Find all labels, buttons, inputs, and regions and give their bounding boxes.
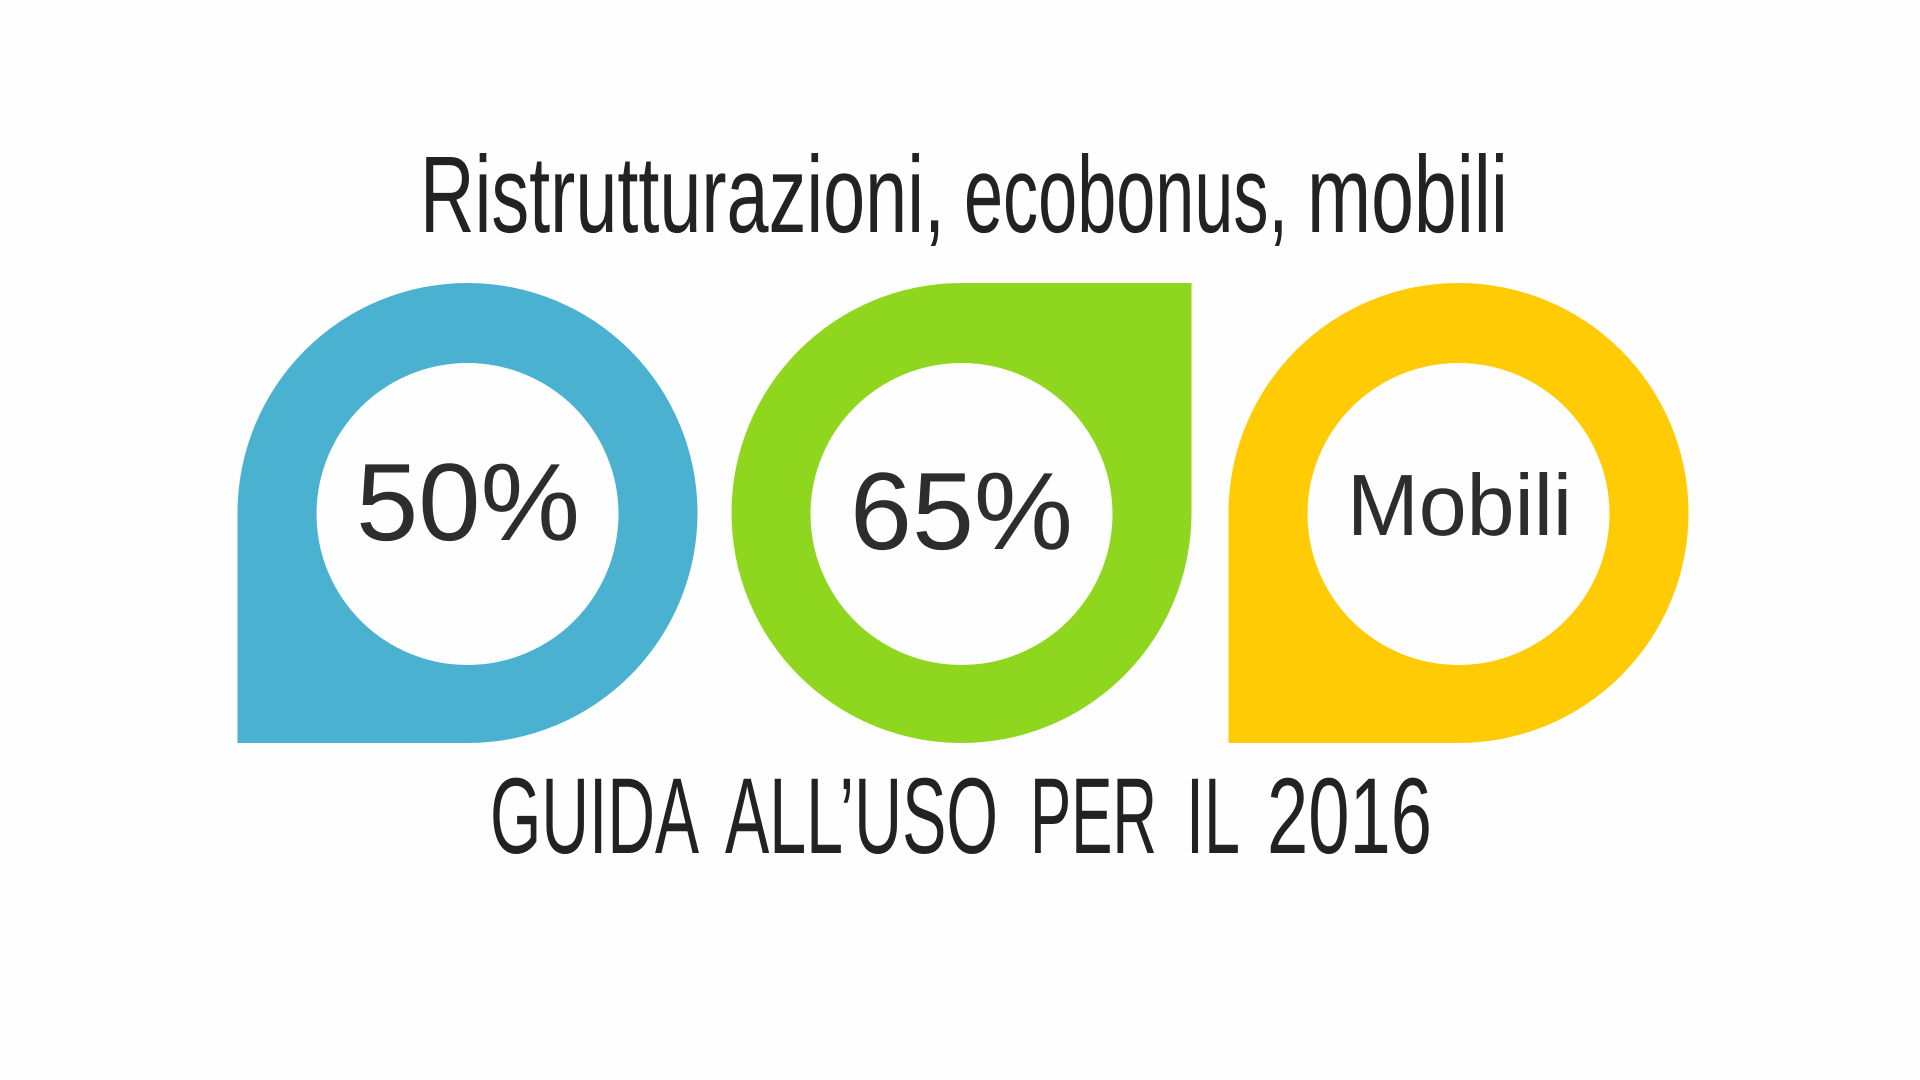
title: ecobonus,	[964, 134, 1288, 256]
panel: 65% green drop	[732, 283, 1192, 743]
panel: 50% blue drop	[238, 283, 697, 743]
label: 65%: 65%	[850, 450, 1073, 573]
yellow drop shape	[1228, 283, 1688, 743]
title: Ristrutturazioni,	[420, 134, 945, 256]
subtitle: ALL’USO	[725, 755, 998, 876]
subtitle	[490, 755, 1432, 876]
blue drop shape	[238, 283, 697, 743]
subtitle: PER	[1030, 755, 1157, 876]
green drop shape	[732, 283, 1192, 743]
subtitle: GUIDA	[490, 755, 699, 876]
title	[420, 134, 1508, 256]
panel: Mobili yellow drop	[1228, 283, 1688, 743]
subtitle: IL	[1186, 755, 1240, 876]
label: Mobili: Mobili	[1347, 457, 1572, 554]
label: 50%: 50%	[356, 441, 580, 564]
title: mobili	[1307, 134, 1508, 256]
subtitle: 2016	[1267, 755, 1432, 876]
